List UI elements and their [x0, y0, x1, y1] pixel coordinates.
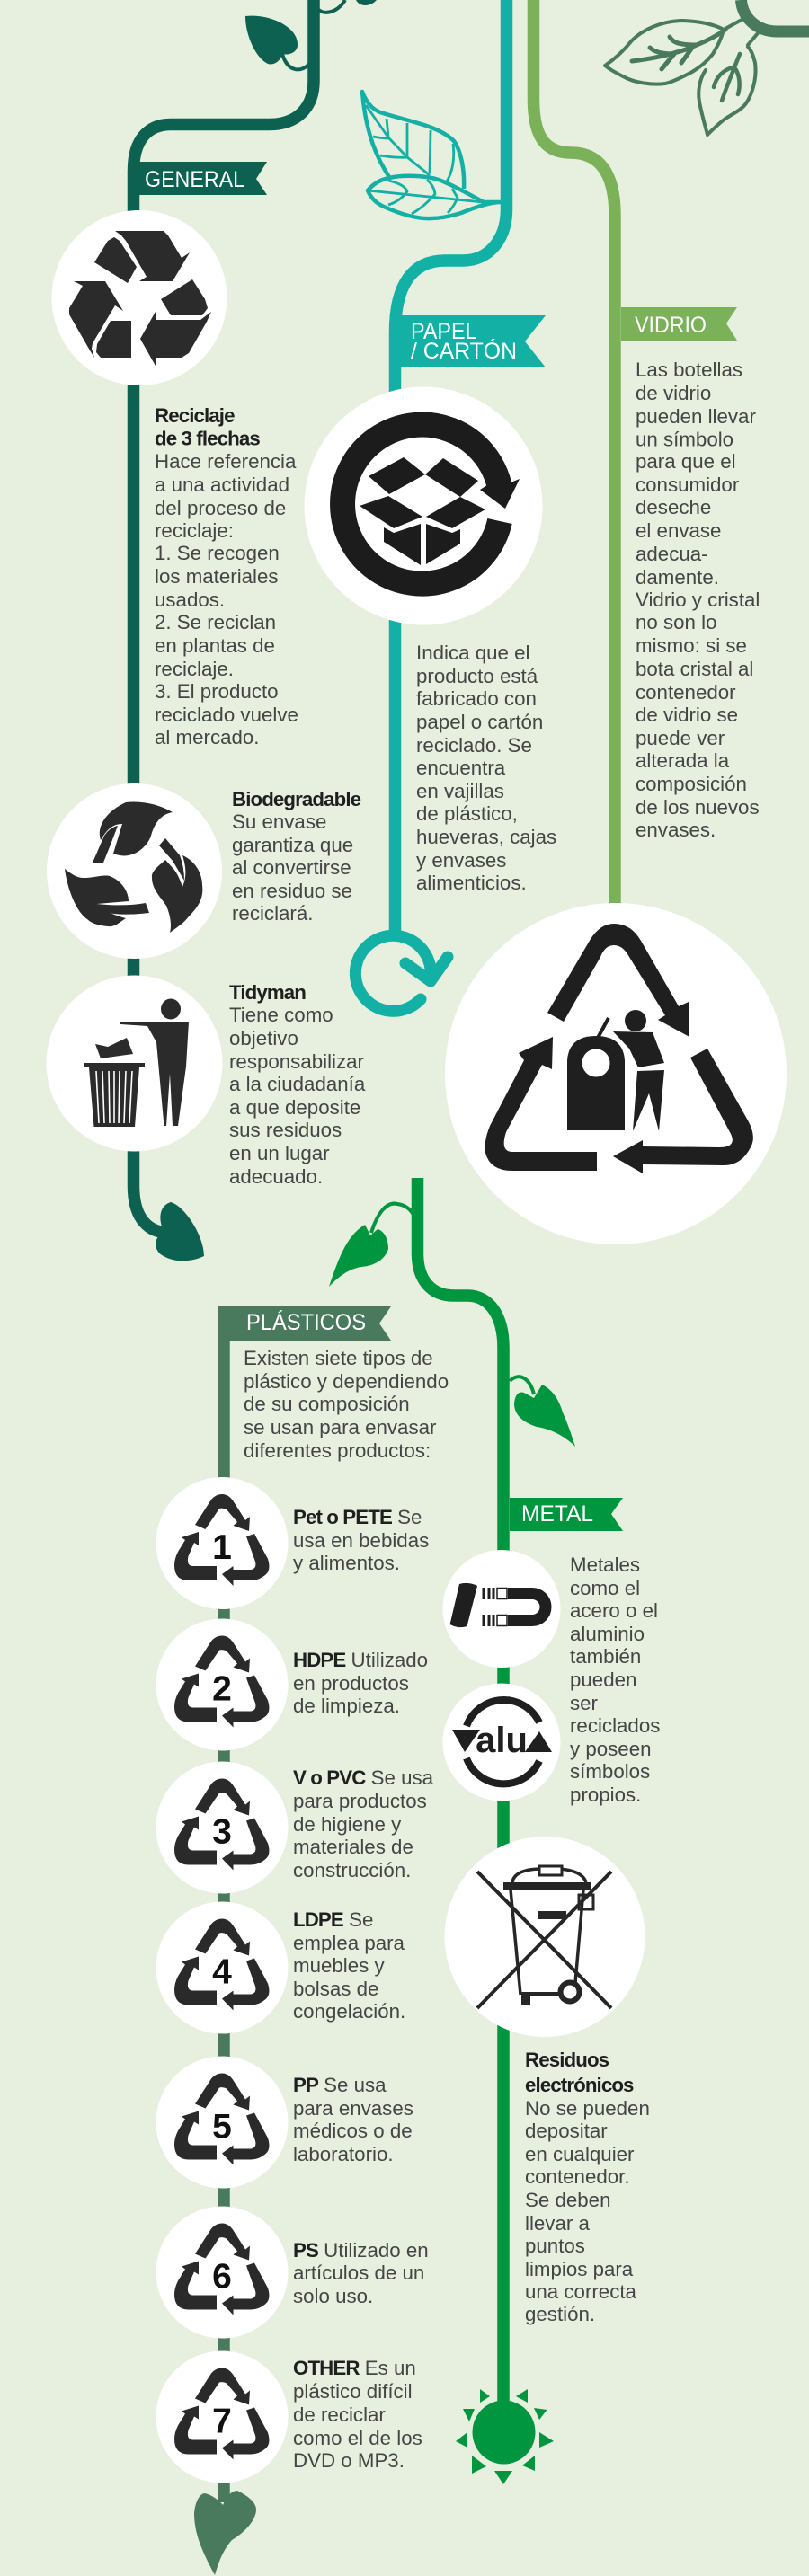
text: ps: solo uso. [293, 2285, 373, 2307]
text: hdpe: de limpieza. [293, 1695, 400, 1717]
text: metal: como el [570, 1577, 640, 1599]
leaf: metal upper [329, 1204, 413, 1287]
text: papel carton: y envases [416, 849, 506, 872]
text: pp: para envases [293, 2097, 413, 2120]
icon: plastic 1: 1 [212, 1528, 232, 1567]
text: vidrio: mismo: si se [636, 634, 747, 657]
text: ps: PS Utilizado en [293, 2239, 429, 2262]
text: pvc: de higiene y [293, 1813, 402, 1836]
text: residuos electronicos: No se pueden [525, 2097, 650, 2120]
text: metal: reciclados [570, 1714, 660, 1737]
text: vidrio: Vidrio y cristal [636, 589, 760, 611]
text: papel carton: papel o cartón [416, 711, 543, 733]
text: reciclaje de 3 flechas: en plantas de [155, 634, 275, 657]
text: papel carton: hueveras, cajas [416, 826, 556, 848]
text: ldpe: emplea para [293, 1932, 405, 1954]
text: tidyman: en un lugar [229, 1142, 330, 1164]
banner: metal: METAL [521, 1501, 593, 1527]
text: reciclaje de 3 flechas: 1. Se recogen [155, 542, 280, 564]
text: vidrio: bota cristal al [636, 658, 753, 680]
text: tidyman: responsabilizar [229, 1050, 365, 1073]
text: residuos electronicos: gestión. [525, 2303, 595, 2325]
text: residuos electronicos: Residuos [525, 2049, 609, 2071]
text: papel carton: alimenticios. [416, 872, 527, 894]
text: pp: PP Se usa [293, 2074, 387, 2096]
text: metal: y poseen [570, 1738, 651, 1760]
text: vidrio: para que el [636, 450, 736, 473]
banner: general: GENERAL [145, 167, 244, 192]
text: vidrio: contenedor [636, 681, 736, 704]
banner: papel / carton: PAPEL [411, 319, 477, 344]
icon: glass recycling triangle [445, 903, 787, 1244]
text: reciclaje de 3 flechas: reciclado vuelve [155, 704, 298, 726]
icon: plastic 1 [156, 1477, 288, 1609]
leaf: general end [156, 1202, 204, 1261]
text: reciclaje de 3 flechas: reciclaje: [155, 519, 234, 542]
text: vidrio: deseche [636, 496, 711, 518]
text: residuos electronicos: depositar [525, 2120, 608, 2142]
text: reciclaje de 3 flechas: Reciclaje [155, 404, 235, 427]
text: plasticos intro: se usan para envasar [244, 1416, 437, 1438]
text: vidrio: Las botellas [636, 359, 742, 381]
text: papel carton: de plástico, [416, 802, 518, 825]
stem: plasticos [218, 1306, 230, 2502]
text: biodegradable: reciclará. [232, 902, 313, 925]
icon: magnet and steel [442, 1550, 561, 1668]
text: papel carton: encuentra [416, 757, 506, 779]
stem: general [133, 0, 314, 1233]
text: vidrio: composición [636, 773, 747, 795]
text: pp: laboratorio. [293, 2143, 394, 2165]
stem: metal [417, 1178, 503, 2408]
text: ldpe: congelación. [293, 2000, 405, 2023]
text: ps: artículos de un [293, 2262, 424, 2284]
text: plasticos intro: plástico y dependiendo [244, 1370, 449, 1393]
text: residuos electronicos: una correcta [525, 2280, 637, 2303]
banner: plasticos [218, 1306, 391, 1341]
text: other: OTHER Es un [293, 2357, 416, 2379]
text: other: DVD o MP3. [293, 2449, 404, 2472]
text: other: plástico difícil [293, 2380, 413, 2403]
leaf: metal lower [510, 1377, 575, 1447]
text: residuos electronicos: limpios para [525, 2258, 634, 2280]
banner: metal [510, 1498, 623, 1531]
text: hdpe: en productos [293, 1672, 409, 1695]
text: residuos electronicos: en cualquier [525, 2143, 635, 2165]
text: biodegradable: Biodegradable [232, 788, 361, 810]
text: tidyman: objetivo [229, 1027, 298, 1049]
text: metal: propios. [570, 1784, 641, 1806]
icon: aluminium [442, 1684, 561, 1801]
icon: crossed out bin [444, 1837, 645, 2037]
banner: vidrio: VIDRIO [635, 313, 707, 338]
icon: plastic 2 [156, 1619, 288, 1750]
text: residuos electronicos: electrónicos [525, 2074, 634, 2096]
text: pet: Pet o PETE Se [293, 1506, 422, 1528]
text: reciclaje de 3 flechas: 2. Se reciclan [155, 611, 276, 633]
text: plasticos intro: Existen siete tipos de [244, 1347, 433, 1369]
leaf: top dark green [245, 0, 377, 69]
icon: plastic 3: 3 [212, 1813, 232, 1851]
text: reciclaje de 3 flechas: a una actividad [155, 474, 289, 496]
text: tidyman: sus residuos [229, 1119, 342, 1141]
text: plasticos intro: diferentes productos: [244, 1439, 431, 1462]
icon: aluminium: alu [476, 1721, 528, 1760]
text: vidrio: el envase [636, 519, 721, 542]
icon: recycling three arrows [52, 210, 227, 385]
text: vidrio: puede ver [636, 727, 725, 749]
banner: papel / carton [401, 315, 546, 367]
text: hdpe: HDPE Utilizado [293, 1649, 428, 1671]
icon: plastic 5: 5 [212, 2108, 232, 2146]
text: reciclaje de 3 flechas: Hace referencia [155, 450, 297, 473]
text: vidrio: pueden llevar [636, 405, 756, 428]
text: pvc: V o PVC Se usa [293, 1766, 433, 1789]
leaf: teal outline [362, 92, 501, 218]
text: reciclaje de 3 flechas: 3. El producto [155, 680, 279, 703]
text: papel carton: fabricado con [416, 687, 537, 710]
banner: general [139, 162, 267, 195]
text: tidyman: Tiene como [229, 1004, 333, 1026]
text: residuos electronicos: puntos [525, 2235, 585, 2257]
text: metal: también [570, 1645, 641, 1668]
text: papel carton: Indica que el [416, 642, 529, 664]
text: tidyman: a la ciudadanía [229, 1073, 366, 1095]
text: reciclaje de 3 flechas: al mercado. [155, 726, 259, 748]
icon: plastic 7: 7 [212, 2403, 232, 2440]
stem and leaves: top right [605, 0, 809, 135]
text: residuos electronicos: Se deben [525, 2189, 610, 2211]
icon: biodegradable leaves [47, 783, 222, 959]
banner: plasticos: PLÁSTICOS [246, 1309, 366, 1335]
text: vidrio: no son lo [636, 611, 717, 633]
stem: papel [396, 0, 507, 934]
text: metal: símbolos [570, 1760, 650, 1783]
text: residuos electronicos: contenedor. [525, 2165, 630, 2188]
text: ldpe: bolsas de [293, 1978, 378, 2000]
text: residuos electronicos: llevar a [525, 2212, 590, 2235]
text: metal: aluminio [570, 1623, 645, 1645]
text: pp: médicos o de [293, 2120, 413, 2142]
text: metal: Metales [570, 1554, 640, 1576]
text: metal: ser [570, 1692, 599, 1714]
text: tidyman: adecuado. [229, 1165, 323, 1188]
icon: plastic 4 [156, 1901, 288, 2034]
text: reciclaje de 3 flechas: de 3 flechas [155, 428, 260, 449]
text: other: como el de los [293, 2427, 422, 2449]
icon: plastic 6 [156, 2207, 288, 2338]
icon: sun end [456, 2389, 554, 2484]
icon: spiral arrow [355, 935, 448, 1011]
text: tidyman: Tidyman [229, 981, 306, 1004]
text: ldpe: muebles y [293, 1954, 385, 1977]
text: other: de reciclar [293, 2403, 386, 2426]
text: pvc: para productos [293, 1790, 427, 1812]
text: papel carton: producto está [416, 665, 538, 687]
icon: plastic 4: 4 [212, 1953, 232, 1991]
text: biodegradable: Su envase [232, 810, 326, 833]
icon: plastic 2: 2 [212, 1669, 232, 1709]
text: pet: usa en bebidas [293, 1529, 429, 1552]
banner: vidrio [621, 307, 737, 341]
icon: recycled cardboard box [304, 386, 543, 625]
text: pvc: construcción. [293, 1859, 411, 1881]
text: vidrio: adecua- [636, 543, 708, 565]
icon: plastic 6: 6 [212, 2257, 232, 2297]
text: plasticos intro: de su composición [244, 1393, 410, 1415]
text: metal: pueden [570, 1669, 636, 1691]
icon: plastic 7 [156, 2350, 288, 2483]
text: reciclaje de 3 flechas: los materiales [155, 565, 279, 588]
text: vidrio: consumidor [636, 474, 740, 496]
icon: plastic 3 [156, 1761, 288, 1894]
text: reciclaje de 3 flechas: del proceso de [155, 497, 286, 519]
text: vidrio: un símbolo [636, 428, 733, 451]
text: ldpe: LDPE Se [293, 1908, 373, 1931]
text: biodegradable: en residuo se [232, 880, 352, 902]
text: biodegradable: garantiza que [232, 834, 353, 856]
text: papel carton: en vajillas [416, 780, 504, 802]
banner: papel / carton: / CARTÓN [411, 338, 517, 364]
text: pvc: materiales de [293, 1836, 413, 1858]
text: pet: y alimentos. [293, 1552, 400, 1574]
text: vidrio: de los nuevos [636, 796, 760, 819]
text: vidrio: envases. [636, 819, 716, 841]
text: reciclaje de 3 flechas: reciclaje. [155, 658, 234, 680]
text: tidyman: a que deposite [229, 1096, 360, 1119]
text: metal: acero o el [570, 1599, 658, 1622]
text: vidrio: damente. [636, 566, 719, 589]
text: vidrio: de vidrio se [636, 704, 738, 726]
text: biodegradable: al convertirse [232, 856, 351, 879]
text: papel carton: reciclado. Se [416, 734, 532, 757]
icon: plastic 5 [156, 2056, 288, 2189]
text: reciclaje de 3 flechas: usados. [155, 589, 225, 611]
text: vidrio: de vidrio [636, 382, 711, 404]
leaf: plasticos end [194, 2491, 256, 2575]
text: vidrio: alterada la [636, 749, 730, 772]
stem: vidrio [534, 0, 615, 907]
icon: tidyman [47, 976, 223, 1152]
